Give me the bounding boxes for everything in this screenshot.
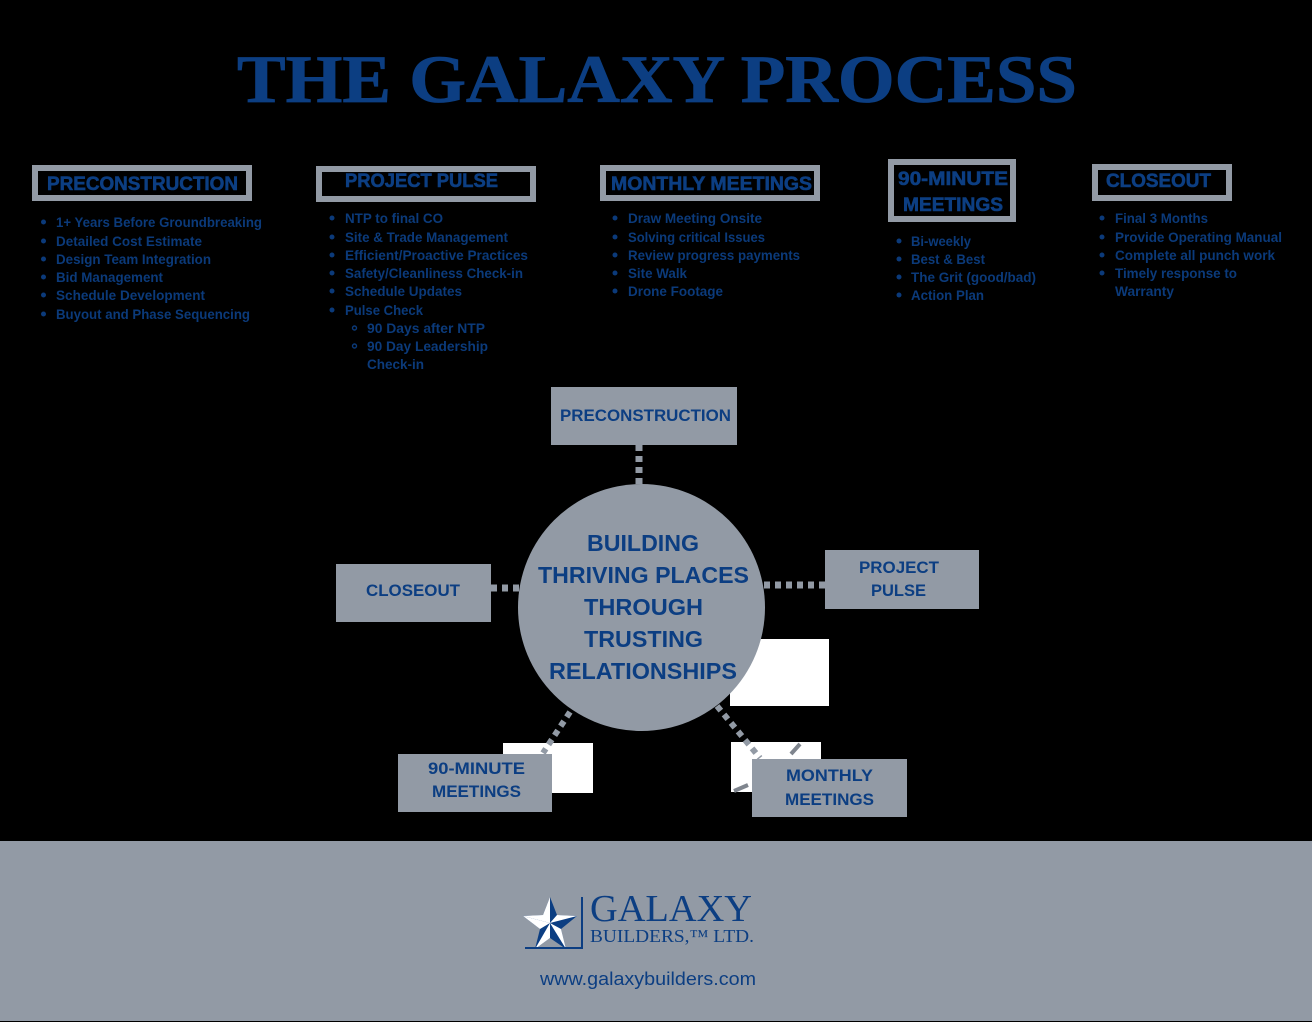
panel: monthly meetings column: Drone Footage bbox=[628, 283, 723, 299]
node: project pulse: PULSE bbox=[871, 581, 926, 600]
node: closeout: CLOSEOUT bbox=[366, 581, 461, 600]
panel: monthly meetings column: Solving critical Issues bbox=[628, 229, 765, 245]
center circle: THRIVING PLACES bbox=[538, 562, 749, 588]
panel: project pulse column: 90 Days after NTP bbox=[367, 320, 485, 336]
connector: 90-minute meetings bbox=[543, 712, 570, 753]
panel: preconstruction column: Detailed Cost Estimate bbox=[56, 233, 202, 249]
title: THE GALAXY PROCESS bbox=[237, 41, 1077, 117]
hub diagram bbox=[336, 387, 979, 817]
white backing rectangles bbox=[503, 639, 829, 793]
panel: closeout column: Complete all punch work bbox=[1115, 247, 1275, 263]
panel: project pulse column: NTP to final CO bbox=[345, 210, 443, 226]
connector: project pulse bbox=[764, 582, 825, 588]
panel: 90-minute meetings column: The Grit (good/bad) bbox=[911, 269, 1036, 285]
panel: closeout column bbox=[1095, 167, 1282, 299]
node: project pulse bbox=[825, 550, 979, 609]
panel: preconstruction column: 1+ Years Before Groundbreaking bbox=[56, 214, 262, 230]
panel: project pulse column: Efficient/Proactive Practices bbox=[345, 247, 528, 263]
center circle: RELATIONSHIPS bbox=[549, 658, 737, 684]
panel: preconstruction column: Buyout and Phase Sequencing bbox=[56, 306, 250, 322]
panel: project pulse column: Schedule Updates bbox=[345, 283, 462, 299]
panel: 90-minute meetings column: Action Plan bbox=[911, 287, 984, 303]
panel: monthly meetings column: Review progress payments bbox=[628, 247, 800, 263]
center circle bbox=[518, 484, 765, 731]
panel: closeout column: Provide Operating Manual bbox=[1115, 229, 1282, 245]
panel: 90-minute meetings column: Best & Best bbox=[911, 251, 985, 267]
panel: closeout column: Final 3 Months bbox=[1115, 210, 1208, 226]
website url: www.galaxybuilders.com bbox=[539, 969, 756, 989]
node: 90-minute meetings bbox=[398, 754, 552, 812]
footer band bbox=[0, 841, 1312, 1021]
panel: project pulse column bbox=[319, 169, 533, 372]
node: monthly meetings bbox=[752, 759, 907, 817]
node: monthly meetings: MONTHLY bbox=[786, 766, 874, 785]
node: monthly meetings: MEETINGS bbox=[785, 790, 874, 809]
logo: Galaxy Builders: GALAXY bbox=[590, 888, 752, 930]
node: project pulse: PROJECT bbox=[859, 558, 940, 577]
connector: preconstruction bbox=[636, 445, 642, 484]
panel: monthly meetings column: Draw Meeting Onsite bbox=[628, 210, 762, 226]
center circle: BUILDING bbox=[587, 530, 699, 556]
panel: preconstruction column: Design Team Integration bbox=[56, 251, 211, 267]
panel: 90-minute meetings column: MEETINGS bbox=[903, 195, 1003, 216]
center circle: TRUSTING bbox=[584, 626, 703, 652]
panel: preconstruction column: PRECONSTRUCTION bbox=[47, 174, 238, 195]
panel: 90-minute meetings column bbox=[891, 162, 1036, 303]
panel: project pulse column: Pulse Check bbox=[345, 302, 423, 318]
node: 90-minute meetings: MEETINGS bbox=[432, 782, 521, 801]
panel: project pulse column: Check-in bbox=[367, 356, 424, 372]
node: 90-minute meetings: 90-MINUTE bbox=[428, 759, 525, 778]
panel: closeout column: Warranty bbox=[1115, 283, 1174, 299]
panel: project pulse column: PROJECT PULSE bbox=[345, 171, 498, 192]
logo: Galaxy Builders bbox=[523, 888, 754, 949]
panel: 90-minute meetings column: Bi-weekly bbox=[911, 233, 971, 249]
connector: closeout bbox=[491, 584, 520, 592]
panel: preconstruction column bbox=[35, 168, 262, 322]
center circle: THROUGH bbox=[584, 594, 703, 620]
panel: project pulse column: Site & Trade Management bbox=[345, 229, 508, 245]
panel: closeout column: Timely response to bbox=[1115, 265, 1237, 281]
icon: star bbox=[523, 897, 577, 949]
panel: project pulse column: 90 Day Leadership bbox=[367, 338, 488, 354]
panel: 90-minute meetings column: 90-MINUTE bbox=[898, 169, 1008, 190]
node: preconstruction: PRECONSTRUCTION bbox=[560, 406, 731, 425]
panel: project pulse column: Safety/Cleanliness Check-in bbox=[345, 265, 523, 281]
panel: monthly meetings column: MONTHLY MEETINGS bbox=[611, 174, 812, 195]
logo: Galaxy Builders: BUILDERS,™ LTD. bbox=[590, 926, 754, 946]
panel: closeout column: CLOSEOUT bbox=[1106, 171, 1211, 192]
panel: monthly meetings column: Site Walk bbox=[628, 265, 687, 281]
connector: monthly meetings bbox=[717, 706, 760, 758]
node: closeout bbox=[336, 564, 491, 622]
panel: monthly meetings column bbox=[603, 168, 817, 299]
panel: preconstruction column: Schedule Development bbox=[56, 287, 205, 303]
node: preconstruction bbox=[551, 387, 737, 445]
panel: preconstruction column: Bid Management bbox=[56, 269, 163, 285]
